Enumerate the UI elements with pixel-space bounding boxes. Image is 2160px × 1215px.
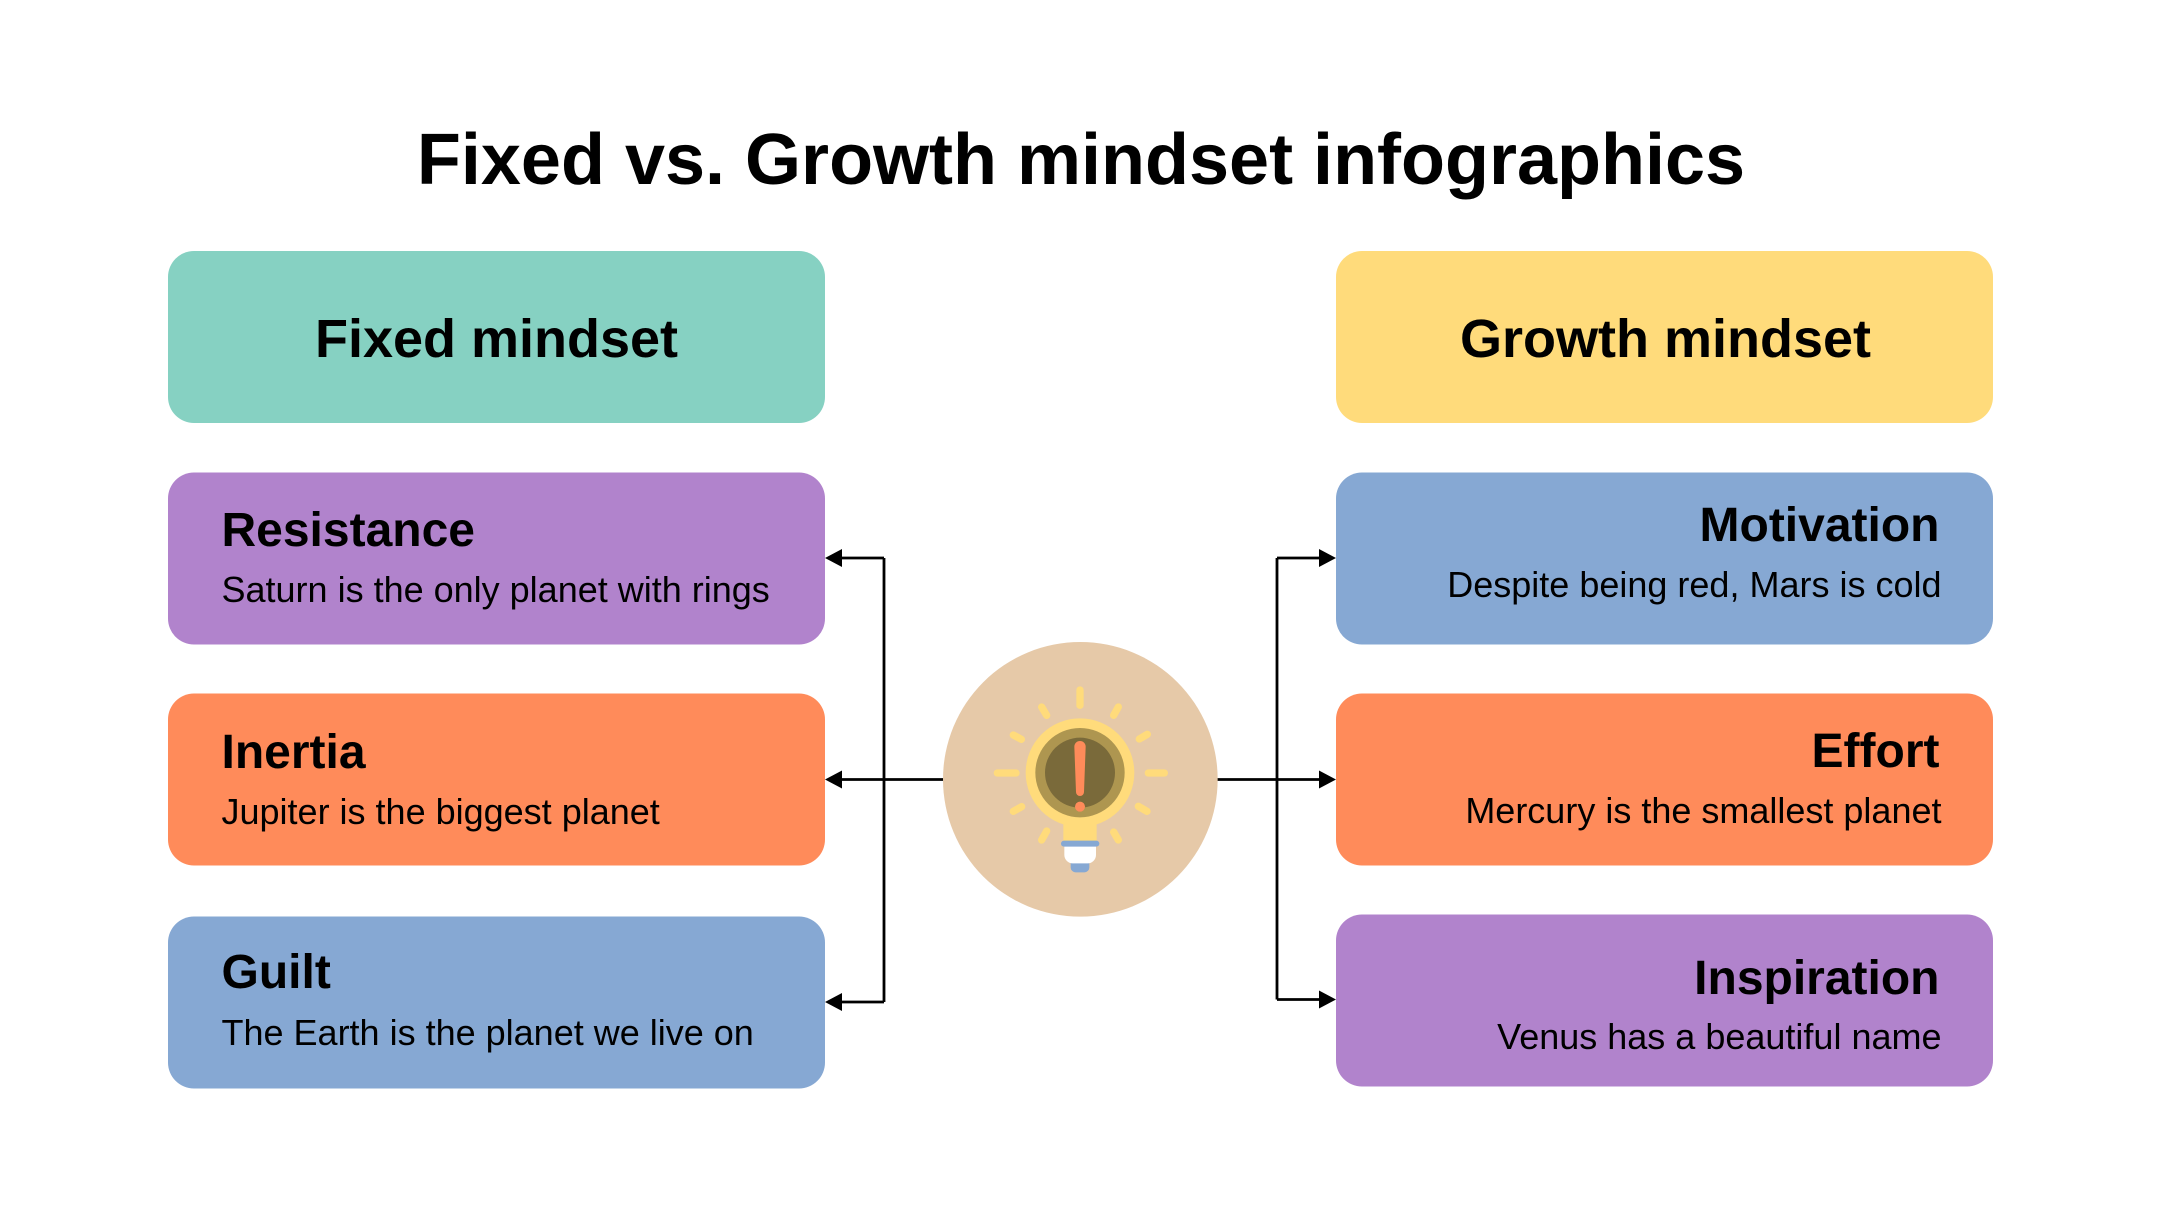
title: Fixed vs. Growth mindset infographics [417,120,1745,200]
panel: effort [1336,694,1993,866]
panel: inspiration [1336,914,1993,1086]
panel: guilt: The Earth is the planet we live on [222,1012,754,1053]
panel: guilt: Guilt [222,946,331,999]
panel: inspiration: Venus has a beautiful name [1497,1016,1942,1057]
panel: motivation: Despite being red, Mars is cold [1447,564,1942,605]
panel: fixed mindset header [168,251,825,423]
panel: growth mindset header [1336,251,1993,423]
panel: guilt [168,916,825,1088]
panel: resistance [168,472,825,644]
arrows: left connectors [825,549,945,1011]
panel: motivation: Motivation [1700,499,1940,552]
panel: inertia: Jupiter is the biggest planet [222,791,660,832]
panel: effort: Effort [1812,725,1940,778]
panel: motivation [1336,472,1993,644]
panel: fixed mindset header: Fixed mindset [315,309,678,369]
panel: inspiration: Inspiration [1694,952,1940,1005]
panel: inertia: Inertia [222,726,366,779]
panel: resistance: Saturn is the only planet with rings [222,569,770,610]
icon: light bulb in circle [943,642,1218,917]
panel: growth mindset header: Growth mindset [1460,309,1871,369]
panel: resistance: Resistance [222,504,475,557]
panel: effort: Mercury is the smallest planet [1465,790,1942,831]
panel: inertia [168,694,825,866]
arrows: right connectors [1215,549,1336,1008]
